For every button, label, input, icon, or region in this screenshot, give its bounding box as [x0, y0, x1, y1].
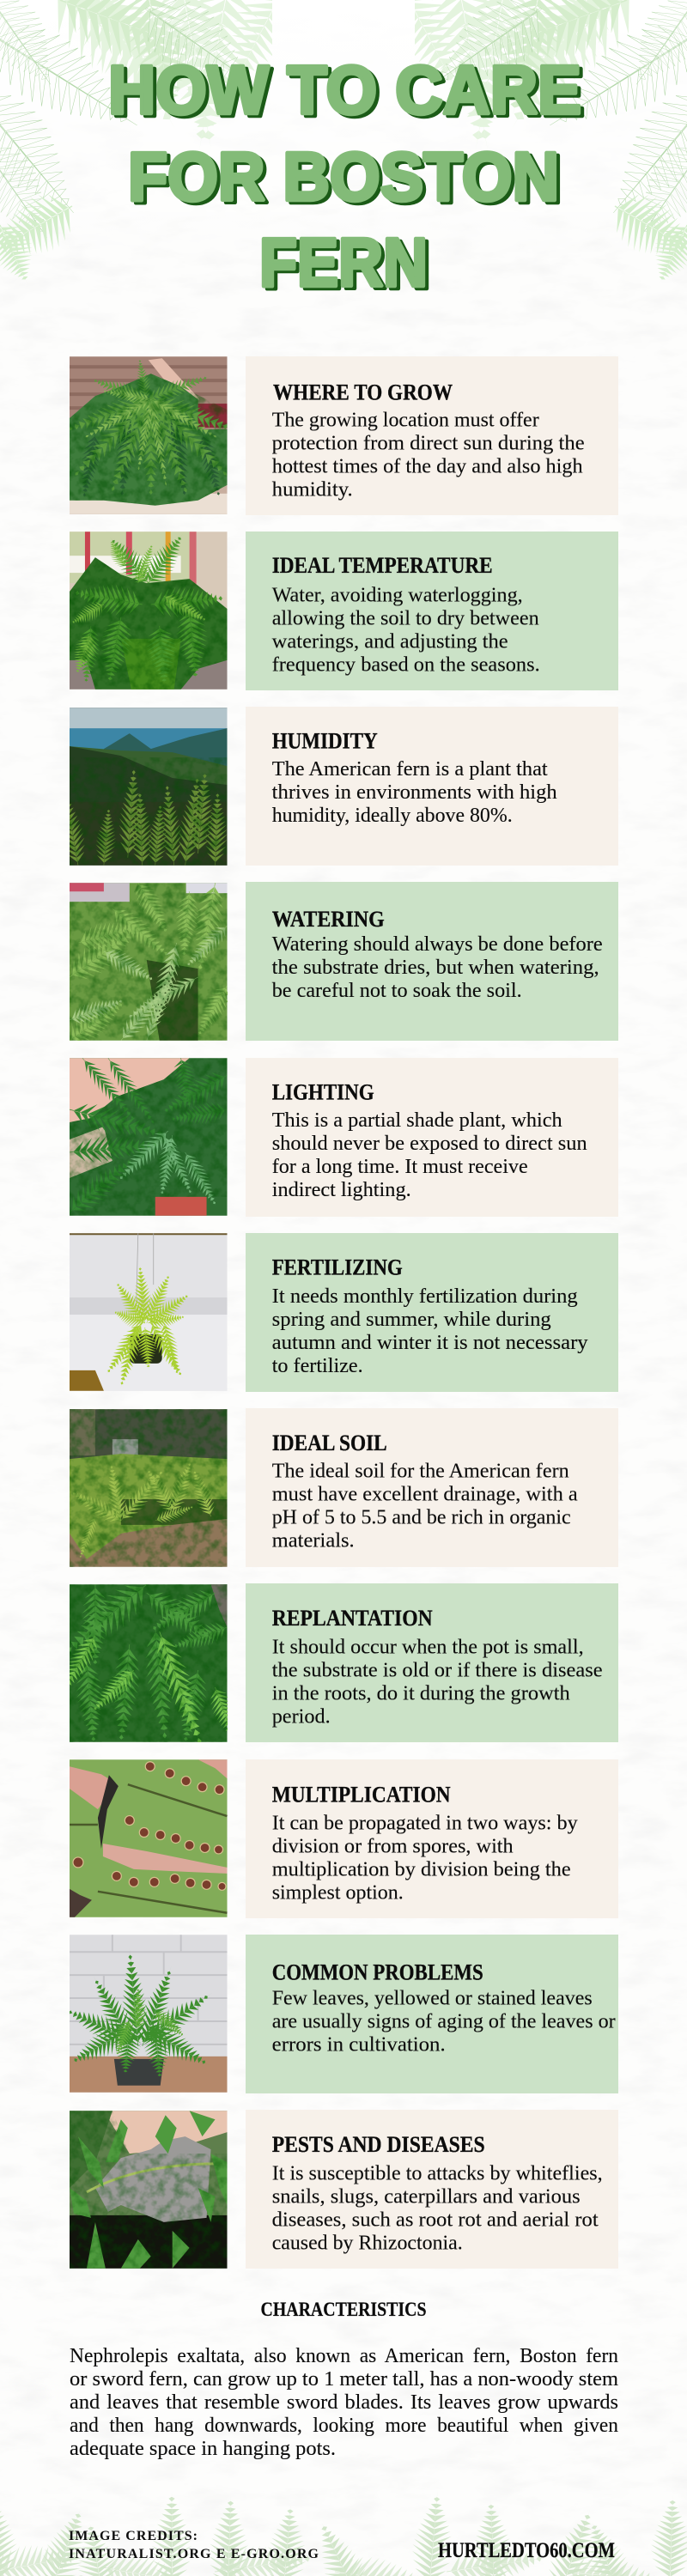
- body text: [272, 1636, 603, 1728]
- heading: WHERE TO GROW: [273, 380, 453, 404]
- heading: FERTILIZING: [272, 1255, 403, 1279]
- body text: should never be exposed to direct sun: [272, 1132, 587, 1155]
- body text: errors in cultivation.: [272, 2032, 446, 2056]
- body text: diseases, such as root rot and aerial rot: [272, 2208, 599, 2231]
- photo: potted fern on table before brick wall: [70, 1935, 227, 2093]
- image credits: IMAGE CREDITS:: [69, 2529, 198, 2543]
- panel: pests and diseases: [246, 2110, 618, 2269]
- body text: [272, 1986, 616, 2056]
- row: common problems: [70, 1935, 618, 2093]
- heading: COMMON PROBLEMS: [272, 1959, 483, 1984]
- title: HOW TO CARE: [108, 52, 581, 128]
- panel: common problems: [246, 1935, 618, 2093]
- body text: for a long time. It must receive: [272, 1155, 528, 1178]
- panel: where to grow: [246, 355, 618, 515]
- body text: division or from spores, with: [272, 1834, 514, 1857]
- panel: lighting: [246, 1058, 618, 1216]
- body text: multiplication by division being the: [272, 1857, 571, 1880]
- panel: humidity: [246, 707, 618, 866]
- photo: hanging yellow-green fern: [70, 1233, 227, 1391]
- body text: This is a partial shade plant, which: [272, 1109, 562, 1132]
- photo: fern bed on mulch: [70, 1409, 227, 1567]
- body text: [272, 757, 557, 827]
- body text: be careful not to soak the soil.: [272, 979, 522, 1002]
- body text: waterings, and adjusting the: [272, 629, 508, 653]
- row: watering: [70, 882, 618, 1041]
- body text: [272, 2161, 603, 2254]
- body text: are usually signs of aging of the leaves or: [272, 2009, 616, 2032]
- panel: replantation: [246, 1583, 618, 1742]
- body text: in the roots, do it during the growth: [272, 1682, 570, 1705]
- body text: The ideal soil for the American fern: [272, 1460, 569, 1483]
- body text: It should occur when the pot is small,: [272, 1636, 584, 1659]
- photo: spores on frond undersides: [70, 1759, 228, 1917]
- body text: [272, 933, 603, 1002]
- body text: period.: [272, 1705, 331, 1728]
- characteristics paragraph: Nephrolepis exaltata, also known as American fern, Boston fern: [70, 2344, 618, 2367]
- panel: ideal soil: [246, 1408, 618, 1567]
- heading: WATERING: [272, 907, 385, 932]
- body text: caused by Rhizoctonia.: [272, 2231, 463, 2254]
- photo: fern attacked by disease: [70, 2111, 228, 2269]
- body text: hottest times of the day and also high: [272, 454, 583, 477]
- body text: must have excellent drainage, with a: [272, 1483, 578, 1506]
- row: lighting: [70, 1058, 618, 1217]
- body text: snails, slugs, caterpillars and various: [272, 2184, 581, 2208]
- photo: fern with pink wall and red pot: [70, 1058, 228, 1216]
- body text: indirect lighting.: [272, 1178, 411, 1201]
- heading: IDEAL SOIL: [272, 1431, 387, 1455]
- characteristics paragraph: adequate space in hanging pots.: [70, 2437, 336, 2460]
- top left fern: [0, 0, 321, 293]
- photo: close-up of green fronds: [70, 1584, 228, 1742]
- body text: allowing the soil to dry between: [272, 606, 539, 629]
- body text: It can be propagated in two ways: by: [272, 1811, 578, 1834]
- characteristics section: [70, 2299, 618, 2460]
- body text: [272, 1109, 587, 1201]
- title: [108, 52, 584, 301]
- heading: LIGHTING: [272, 1079, 374, 1104]
- body text: The growing location must offer: [272, 408, 539, 431]
- decorative fern band at bottom: [0, 2497, 687, 2576]
- row: ideal temperature: [70, 532, 618, 690]
- row: replantation: [70, 1583, 618, 1742]
- body text: Few leaves, yellowed or stained leaves: [272, 1986, 593, 2009]
- body text: to fertilize.: [272, 1354, 363, 1377]
- body text: [272, 408, 585, 501]
- body text: spring and summer, while during: [272, 1308, 551, 1331]
- top right fern: [366, 0, 687, 293]
- body text: [272, 1285, 588, 1377]
- photo: mountain landscape with ferns: [70, 708, 227, 866]
- panel: watering: [246, 882, 618, 1041]
- characteristics paragraph: and leaves that resemble sword blades. Its leaves grow upwards: [70, 2391, 618, 2414]
- body text: Water, avoiding waterlogging,: [272, 583, 523, 606]
- body text: Watering should always be done before: [272, 933, 603, 956]
- characteristics paragraph: and then hang downwards, looking more beautiful when given: [70, 2414, 618, 2437]
- body text: [272, 1811, 578, 1904]
- footer: [69, 2529, 615, 2562]
- panel: fertilizing: [246, 1233, 618, 1392]
- title: FOR BOSTON: [128, 138, 559, 215]
- body text: thrives in environments with high: [272, 781, 557, 804]
- heading: PESTS AND DISEASES: [272, 2132, 485, 2157]
- decorative fern corners at top: [0, 0, 687, 280]
- photo: hanging fern against wood wall: [70, 356, 228, 514]
- body text: humidity.: [272, 477, 353, 501]
- photo: potted fern by colourful window: [70, 532, 227, 690]
- row: humidity: [70, 707, 618, 866]
- characteristics heading: CHARACTERISTICS: [261, 2299, 426, 2320]
- row: where to grow: [70, 356, 618, 515]
- website: HURTLEDTO60.COM: [438, 2539, 615, 2562]
- row: pests and diseases: [70, 2110, 618, 2269]
- title: FERN: [259, 224, 428, 301]
- heading: REPLANTATION: [272, 1606, 433, 1631]
- body text: The American fern is a plant that: [272, 757, 548, 781]
- body text: the substrate is old or if there is disease: [272, 1659, 603, 1682]
- body text: autumn and winter it is not necessary: [272, 1331, 588, 1354]
- body text: humidity, ideally above 80%.: [272, 804, 513, 827]
- characteristics paragraph: [70, 2344, 618, 2460]
- body text: the substrate dries, but when watering,: [272, 956, 599, 979]
- row: ideal soil: [70, 1408, 618, 1567]
- image credits: INATURALIST.ORG E E-GRO.ORG: [69, 2547, 319, 2561]
- heading: IDEAL TEMPERATURE: [272, 553, 493, 578]
- row: multiplication: [70, 1759, 618, 1918]
- body text: simplest option.: [272, 1880, 404, 1904]
- body text: frequency based on the seasons.: [272, 653, 540, 676]
- photo: bright green fern clump: [70, 883, 228, 1041]
- body text: [272, 1460, 578, 1552]
- image credits: [69, 2529, 319, 2561]
- body text: pH of 5 to 5.5 and be rich in organic: [272, 1506, 571, 1529]
- body text: protection from direct sun during the: [272, 431, 585, 454]
- body text: materials.: [272, 1529, 355, 1552]
- panel: ideal temperature: [246, 532, 618, 690]
- body text: It is susceptible to attacks by whiteflies,: [272, 2161, 603, 2184]
- body text: It needs monthly fertilization during: [272, 1285, 578, 1308]
- panel: multiplication: [246, 1759, 618, 1918]
- heading: MULTIPLICATION: [272, 1782, 451, 1807]
- characteristics paragraph: or sword fern, can grow up to 1 meter tall, has a non-woody stem: [70, 2367, 618, 2391]
- body text: [272, 583, 540, 676]
- heading: HUMIDITY: [272, 729, 378, 754]
- row: fertilizing: [70, 1233, 618, 1392]
